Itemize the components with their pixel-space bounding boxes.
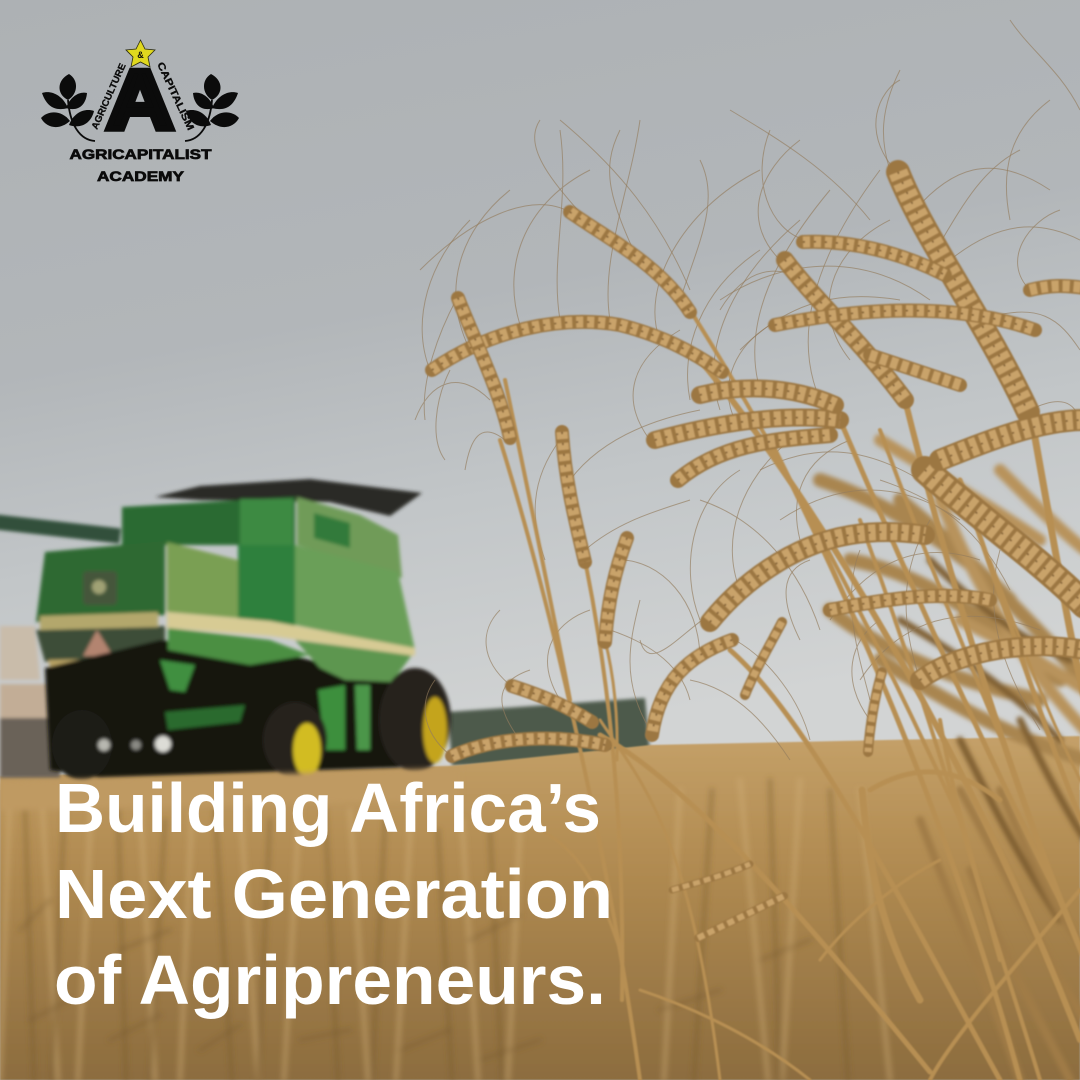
title: of Agripreneurs. [54,941,606,1019]
logo laurel left [41,74,95,141]
title: Building Africa’s [55,769,601,847]
logo arc text left: AGRICULTURE [90,62,129,131]
wheat ears [432,172,1080,938]
logo [41,40,239,184]
bumper lights [98,739,110,751]
logo star: & [137,50,144,60]
roof [155,479,422,516]
lower body [36,626,165,662]
wheels [379,668,451,772]
dense wheat mass, right side [820,440,1080,1080]
front field edge over harvester base [0,768,460,810]
logo name line 2: ACADEMY [97,168,185,184]
logo star [126,40,155,67]
distant tree line [448,698,650,766]
upper hopper [122,497,295,545]
white truck behind harvester [0,626,158,778]
logo big letter A: A [106,53,174,147]
wheat stems [500,310,1080,1080]
undercarriage [45,640,400,778]
logo arc text right: CAPITALISM [154,61,196,132]
logo laurel right [185,74,239,141]
logo name line 1: AGRICAPITALIST [70,146,212,162]
stripes [40,612,158,630]
green combine harvester [0,479,451,780]
auger [0,522,120,536]
title: Next Generation [55,855,613,933]
photo background: wheat field [0,736,1080,1080]
wheat awns [415,20,1080,760]
rear body [36,541,165,622]
logo badge [83,571,117,605]
title [54,769,613,1019]
photo background: sky [0,0,1080,790]
